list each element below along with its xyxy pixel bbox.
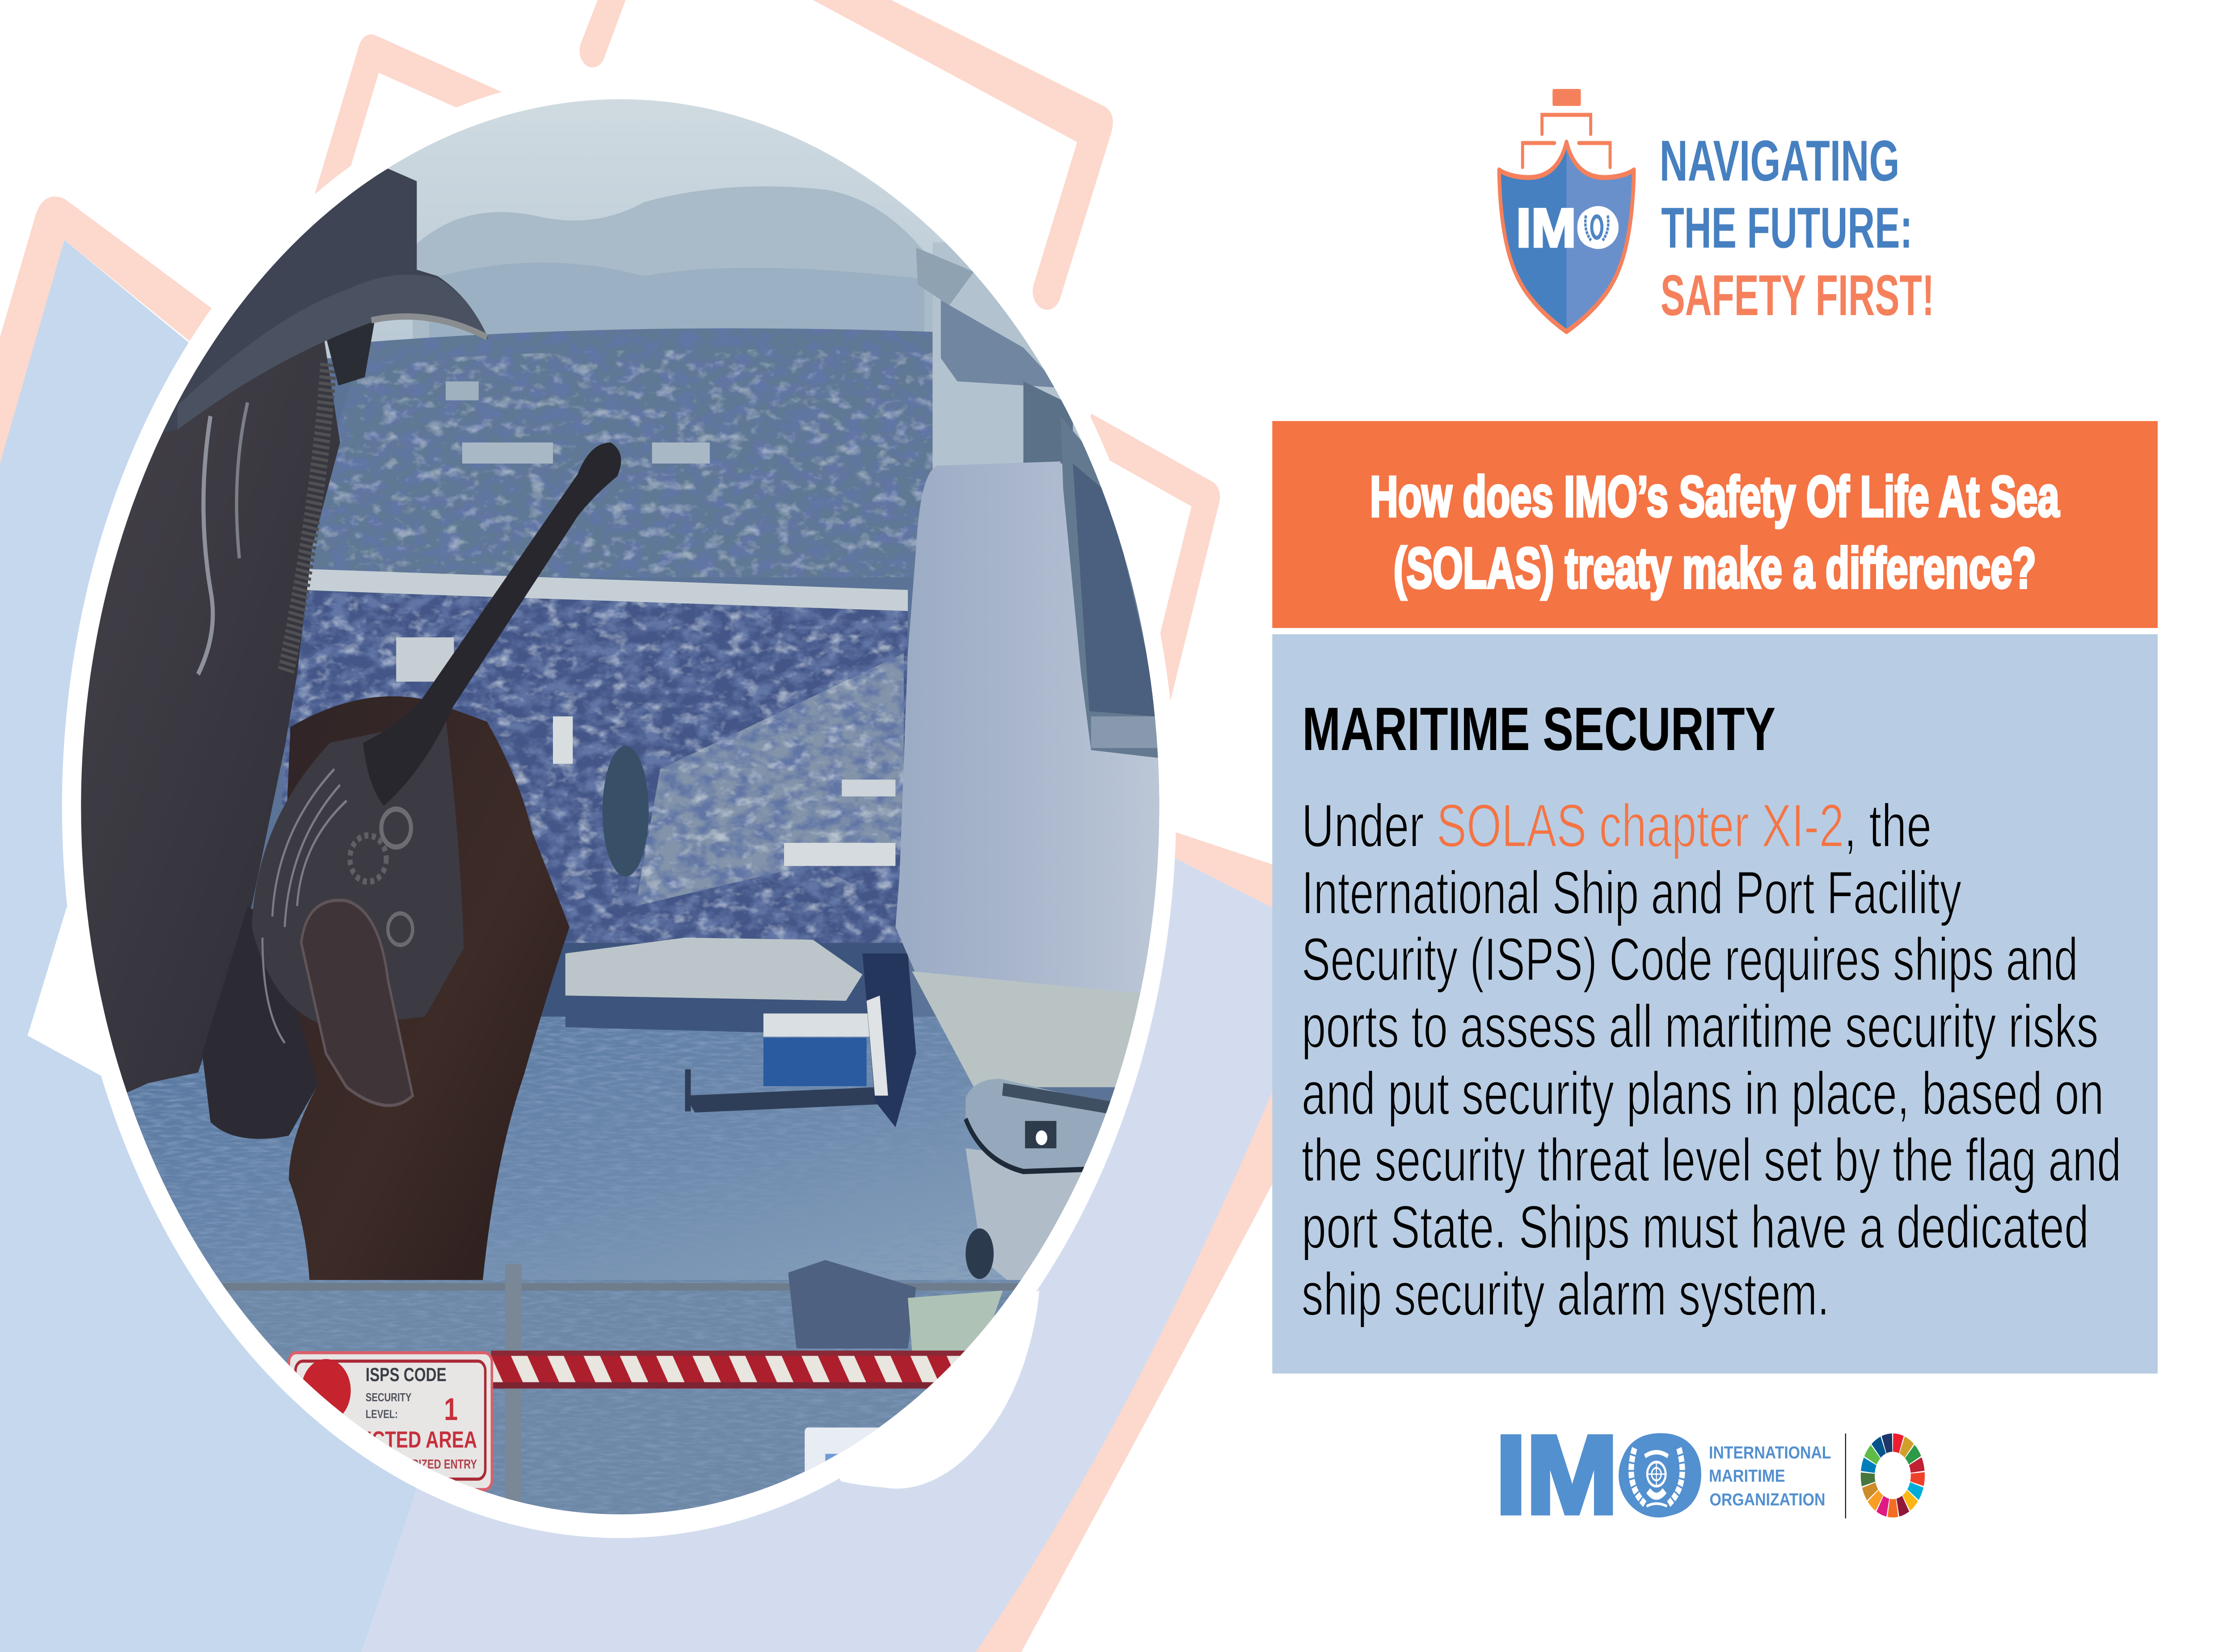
logo: International Maritime Organization	[1496, 1412, 1928, 1537]
photo ship superstructure	[916, 242, 1172, 759]
panel body text: ship security alarm system.	[1302, 1260, 1830, 1328]
photo security sign	[289, 1353, 492, 1490]
logo title text: THE FUTURE:	[1661, 196, 1913, 260]
panel body text: International Ship and Port Facility	[1302, 859, 1962, 927]
photo dense city	[281, 590, 908, 953]
panel body text	[1302, 792, 2121, 1328]
organization name: MARITIME	[1709, 1467, 1785, 1486]
logo: Navigating the Future ship shield	[1499, 89, 1934, 333]
photo person silhouette	[58, 316, 375, 1139]
photo water	[83, 1017, 1007, 1290]
photo waterfront road	[304, 569, 908, 613]
panel body text: ports to assess all maritime security risks	[1302, 992, 2098, 1060]
heading banner: (SOLAS) treaty make a difference?	[1393, 536, 2036, 600]
photo hazard tape	[491, 1351, 966, 1389]
background decoration: coral arc behind lavender wedge	[0, 832, 1281, 1652]
organization name: ORGANIZATION	[1709, 1490, 1825, 1509]
background decoration: lavender wedge	[362, 805, 1281, 1652]
photo barge	[685, 953, 916, 1127]
background decoration: light blue wedge	[0, 240, 613, 1652]
photo hat	[157, 169, 489, 434]
panel body text: Security (ISPS) Code requires ships and	[1302, 925, 2078, 993]
photo white box	[805, 1428, 912, 1512]
photo pier	[565, 938, 862, 1032]
icon: shield	[1499, 142, 1634, 333]
photo hillside town	[297, 329, 982, 577]
logo title text: SAFETY FIRST!	[1661, 263, 1934, 328]
photo hand holding radio	[252, 696, 569, 1280]
organization name	[1709, 1443, 1831, 1509]
photo security sign: ISPS CODE	[366, 1365, 447, 1386]
IMO wordmark: IMO	[1496, 1412, 1704, 1537]
panel body text: port State. Ships must have a dedicated	[1302, 1193, 2089, 1261]
logo title text: NAVIGATING	[1659, 129, 1900, 193]
photo security sign: NO UNAUTHORIZED ENTRY	[344, 1458, 477, 1471]
photo pier shadow band	[248, 943, 908, 1032]
panel: maritime security	[1272, 634, 2158, 1374]
background decoration: coral rounded frames	[0, 0, 1207, 697]
icon: sustainable development goals wheel	[1857, 1429, 1928, 1522]
photo: security officer with radio overlooking a port	[81, 99, 1160, 1514]
background decoration: white facet	[28, 670, 238, 1117]
photo radio antenna	[363, 442, 621, 806]
photo distant hills	[413, 186, 941, 363]
icon: ship funnel and bridge	[1522, 89, 1610, 167]
panel body text: and put security plans in place, based on	[1302, 1059, 2104, 1127]
icon: UN-style emblem	[1631, 1448, 1683, 1506]
heading banner: How does IMO’s Safety Of Life At Sea	[1370, 465, 2059, 529]
photo ship hull	[895, 461, 1164, 1294]
photo security sign: 1	[444, 1392, 458, 1427]
photo fence	[83, 1260, 1238, 1554]
photo security sign: RESTRICTED AREA	[305, 1427, 477, 1453]
organization name: INTERNATIONAL	[1709, 1443, 1831, 1462]
panel body text: Under SOLAS chapter XI-2, the	[1302, 792, 1931, 860]
logo title text	[1659, 129, 1934, 328]
heading banner	[1272, 421, 2158, 628]
shield IMO wordmark: IMO	[1516, 198, 1618, 259]
white ring around photo	[62, 76, 1176, 1538]
panel heading: MARITIME SECURITY	[1302, 695, 1775, 763]
panel body text: the security threat level set by the flag and	[1302, 1126, 2121, 1194]
photo sky	[81, 99, 1160, 1296]
photo security sign: SECURITY	[366, 1391, 412, 1403]
photo security sign: LEVEL:	[366, 1408, 398, 1420]
